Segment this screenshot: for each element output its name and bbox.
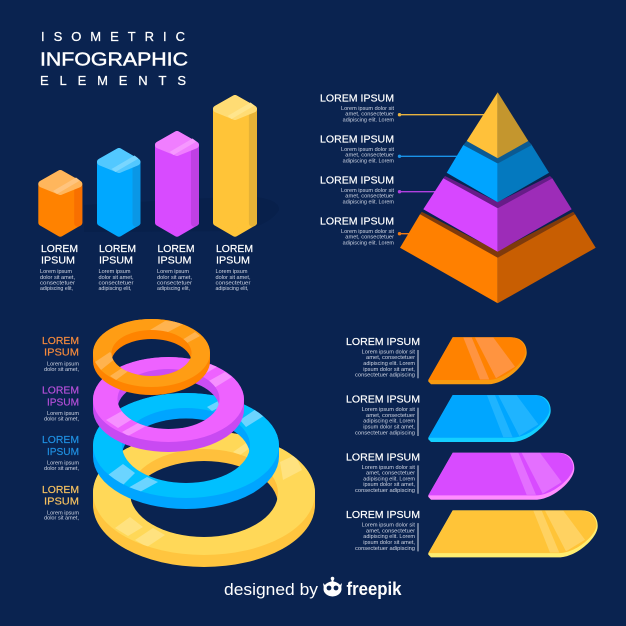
label: pyramid 2: Lorem ipsum dolor sit bbox=[341, 147, 395, 153]
label: ring yellow: dolor sit amet, bbox=[44, 516, 80, 522]
label: tab 1: consectetuer adipiscing bbox=[355, 373, 415, 379]
label: bar 4: Lorem ipsum bbox=[216, 269, 248, 275]
label: ring purple: Lorem ipsum bbox=[47, 411, 80, 417]
label: tab 4: ipsum dolor sit amet, bbox=[363, 540, 416, 546]
label: bar 2: Lorem ipsum bbox=[98, 269, 131, 275]
label: bar 4 bbox=[216, 243, 253, 292]
tab labels bbox=[346, 336, 420, 552]
label: bar 3: consectetuer bbox=[157, 280, 192, 286]
label: bar 1: Lorem ipsum bbox=[40, 269, 73, 275]
label: tab 3 bbox=[346, 451, 420, 494]
label: bar 1: consectetuer bbox=[40, 280, 75, 286]
title bbox=[40, 29, 188, 88]
pyramid connector lines bbox=[398, 113, 485, 235]
label: bar 3: dolor sit amet, bbox=[157, 275, 193, 281]
label: tab 1: amet, consectetuer bbox=[366, 355, 415, 361]
label: ring blue bbox=[42, 434, 80, 472]
label: bar 2 bbox=[98, 243, 136, 292]
layer: blue bbox=[447, 141, 549, 202]
label: ring purple: IPSUM bbox=[47, 396, 79, 408]
label: ring yellow: Lorem ipsum bbox=[47, 510, 80, 516]
label: ring orange: IPSUM bbox=[44, 347, 79, 359]
label: bar 3: LOREM bbox=[158, 243, 194, 255]
layer: yellow bbox=[467, 92, 528, 158]
label: tab 4 bbox=[346, 509, 420, 552]
label: pyramid 1: LOREM IPSUM bbox=[320, 93, 394, 105]
label: bar 3: IPSUM bbox=[158, 254, 192, 266]
label: bar 4: adipiscing elit, bbox=[216, 286, 249, 292]
label: ring yellow: IPSUM bbox=[44, 496, 79, 508]
label: bar 4: consectetuer bbox=[216, 280, 251, 286]
label: ring orange: LOREM bbox=[42, 335, 79, 347]
label: tab 3: amet, consectetuer bbox=[366, 471, 415, 477]
tab: blue bbox=[428, 395, 551, 442]
label: tab 1: Lorem ipsum dolor sit bbox=[362, 350, 416, 356]
label: ring purple: dolor sit amet, bbox=[44, 416, 80, 422]
label: pyramid 3: Lorem ipsum dolor sit bbox=[341, 188, 395, 194]
right tabs bbox=[428, 337, 598, 557]
icon: freepik mascot bbox=[323, 577, 342, 596]
bar: yellow bbox=[216, 98, 254, 233]
label: ring blue: dolor sit amet, bbox=[44, 466, 80, 472]
label: pyramid 1: adipiscing elit. Lorem bbox=[343, 117, 395, 123]
title: ELEMENTS bbox=[40, 73, 186, 88]
layer: orange bbox=[400, 212, 596, 303]
layer: purple bbox=[423, 176, 572, 252]
tab: orange bbox=[428, 337, 527, 384]
label: pyramid 2: amet, consectetuer bbox=[345, 153, 394, 159]
bar shadow bbox=[84, 196, 279, 232]
label: bar 1: LOREM bbox=[41, 243, 78, 255]
bar chart bbox=[42, 98, 279, 233]
stacked rings bbox=[93, 319, 315, 567]
label: pyramid 1: Lorem ipsum dolor sit bbox=[341, 106, 395, 112]
label: pyramid 2 bbox=[320, 134, 395, 164]
label: bar 1: adipiscing elit, bbox=[40, 286, 73, 292]
label: bar 4: dolor sit amet, bbox=[216, 275, 251, 281]
label: tab 2 bbox=[346, 394, 420, 436]
label: bar 3: adipiscing elit, bbox=[157, 286, 190, 292]
pyramid bbox=[400, 92, 596, 303]
ring: yellow bbox=[93, 431, 315, 567]
label: tab 4: consectetuer adipiscing bbox=[355, 546, 415, 552]
label: bar 2: LOREM bbox=[99, 243, 136, 255]
bar: blue bbox=[100, 152, 138, 233]
label: tab 3: LOREM IPSUM bbox=[346, 451, 420, 463]
label: ring blue: IPSUM bbox=[47, 446, 79, 458]
pyramid labels bbox=[320, 93, 395, 246]
ring: orange bbox=[93, 319, 210, 395]
label: tab 2: ipsum dolor sit amet, bbox=[363, 424, 416, 430]
label: pyramid 4: LOREM IPSUM bbox=[320, 216, 394, 228]
label: ring yellow bbox=[42, 484, 80, 522]
label: ring purple bbox=[42, 385, 80, 422]
ring: blue bbox=[93, 393, 279, 509]
label: tab 3: ipsum dolor sit amet, bbox=[363, 482, 416, 488]
label: pyramid 3: LOREM IPSUM bbox=[320, 175, 394, 187]
label: ring blue: Lorem ipsum bbox=[47, 461, 80, 467]
tab: yellow bbox=[428, 510, 598, 557]
label: tab 3: consectetuer adipiscing bbox=[355, 488, 415, 494]
label: bar 2: dolor sit amet, bbox=[98, 275, 134, 281]
label: tab 4: adipiscing elit. Lorem bbox=[363, 534, 416, 540]
label: bar 1: IPSUM bbox=[41, 254, 75, 266]
label: tab 2: Lorem ipsum dolor sit bbox=[362, 407, 416, 413]
label: pyramid 3 bbox=[320, 175, 395, 205]
label: ring orange: dolor sit amet, bbox=[44, 367, 80, 373]
label: bar 3 bbox=[157, 243, 194, 292]
label: bar 2: IPSUM bbox=[99, 254, 133, 266]
bar: orange bbox=[42, 174, 80, 233]
label: ring orange: Lorem ipsum bbox=[47, 362, 80, 368]
label: ring purple: LOREM bbox=[42, 385, 79, 397]
label: pyramid 2: LOREM IPSUM bbox=[320, 134, 394, 146]
footer credit: freepik bbox=[346, 579, 402, 599]
label: tab 4: LOREM IPSUM bbox=[346, 509, 420, 521]
ring labels bbox=[42, 335, 80, 522]
label: pyramid 2: adipiscing elit. Lorem bbox=[343, 158, 395, 164]
label: tab 2: adipiscing elit. Lorem bbox=[363, 419, 416, 425]
label: bar 3: Lorem ipsum bbox=[157, 269, 190, 275]
label: bar 4: LOREM bbox=[216, 243, 253, 255]
label: bar 4: IPSUM bbox=[216, 254, 250, 266]
label: tab 1: LOREM IPSUM bbox=[346, 336, 420, 348]
bar labels bbox=[40, 243, 253, 292]
label: ring orange bbox=[42, 335, 80, 373]
label: tab 2: LOREM IPSUM bbox=[346, 394, 420, 406]
label: pyramid 4: Lorem ipsum dolor sit bbox=[341, 229, 395, 235]
label: tab 3: adipiscing elit. Lorem bbox=[363, 476, 416, 482]
footer credit bbox=[224, 577, 402, 599]
ring: purple bbox=[93, 357, 244, 452]
label: tab 4: Lorem ipsum dolor sit bbox=[362, 523, 416, 529]
label: bar 2: consectetuer bbox=[98, 280, 134, 286]
label: pyramid 4 bbox=[320, 216, 395, 246]
tab: purple bbox=[428, 453, 574, 500]
label: pyramid 1: amet, consectetuer bbox=[345, 112, 394, 118]
title: INFOGRAPHIC bbox=[40, 48, 188, 70]
label: tab 2: amet, consectetuer bbox=[366, 413, 415, 419]
label: tab 3: Lorem ipsum dolor sit bbox=[362, 465, 416, 471]
bar: purple bbox=[158, 134, 196, 233]
label: pyramid 1 bbox=[320, 93, 395, 123]
label: bar 1 bbox=[40, 243, 78, 292]
label: tab 2: consectetuer adipiscing bbox=[355, 430, 415, 436]
label: ring yellow: LOREM bbox=[42, 484, 79, 496]
label: tab 1 bbox=[346, 336, 420, 379]
label: tab 1: adipiscing elit. Lorem bbox=[363, 361, 416, 367]
footer credit: designed by bbox=[224, 581, 319, 599]
label: tab 1: ipsum dolor sit amet, bbox=[363, 367, 416, 373]
label: tab 4: amet, consectetuer bbox=[366, 528, 415, 534]
label: bar 1: dolor sit amet, bbox=[40, 275, 76, 281]
label: pyramid 4: amet, consectetuer bbox=[345, 235, 394, 241]
label: bar 2: adipiscing elit, bbox=[98, 286, 132, 292]
title: ISOMETRIC bbox=[41, 29, 185, 44]
label: pyramid 3: amet, consectetuer bbox=[345, 194, 394, 200]
label: pyramid 3: adipiscing elit. Lorem bbox=[343, 199, 395, 205]
label: ring blue: LOREM bbox=[42, 434, 79, 446]
label: pyramid 4: adipiscing elit. Lorem bbox=[343, 240, 395, 246]
